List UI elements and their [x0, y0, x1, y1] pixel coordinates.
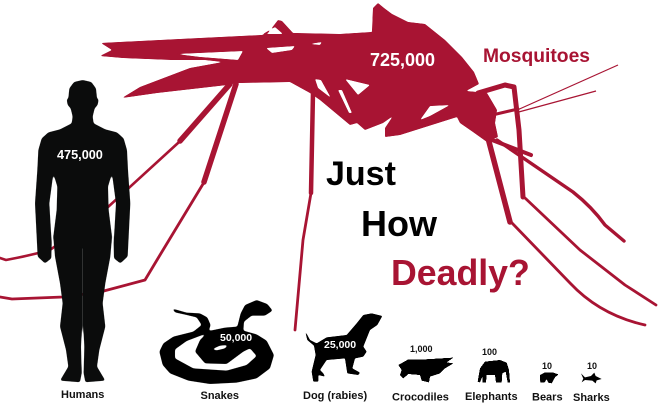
snake label: Snakes [200, 390, 239, 402]
mosquito body [100, 3, 498, 142]
title [326, 155, 530, 293]
shark label: Sharks [573, 392, 610, 404]
mosquito legs [0, 84, 656, 330]
shark number: 10 [587, 361, 597, 371]
icon: human [35, 80, 130, 382]
mosquito illustration [0, 3, 656, 330]
icon: dog [305, 313, 382, 382]
title line: Just: Just [326, 155, 396, 193]
dog label: Dog (rabies) [303, 390, 368, 402]
elephant [465, 347, 518, 403]
human silhouette [35, 80, 130, 401]
icon: elephant [478, 360, 510, 382]
bear [532, 361, 563, 404]
mosquito number: 725,000 [370, 50, 435, 70]
elephant number: 100 [482, 347, 497, 357]
crocodile label: Crocodiles [392, 392, 449, 404]
shark [573, 361, 610, 404]
snake number: 50,000 [220, 332, 252, 344]
dog number: 25,000 [324, 339, 356, 351]
bear label: Bears [532, 392, 563, 404]
human label: Humans [61, 389, 104, 401]
crocodile [392, 344, 453, 404]
icon: shark [581, 373, 602, 383]
dog [303, 313, 382, 402]
crocodile number: 1,000 [410, 344, 433, 354]
title line: Deadly?: Deadly? [391, 253, 530, 293]
mosquito antennae [515, 65, 618, 113]
elephant label: Elephants [465, 391, 518, 403]
icon: snake [159, 300, 274, 384]
title line: How: How [361, 203, 438, 244]
mosquito label: Mosquitoes [483, 46, 590, 67]
bear number: 10 [542, 361, 552, 371]
human number: 475,000 [57, 148, 103, 162]
snake [159, 300, 274, 402]
icon: crocodile [398, 358, 453, 382]
icon: bear [540, 372, 558, 383]
